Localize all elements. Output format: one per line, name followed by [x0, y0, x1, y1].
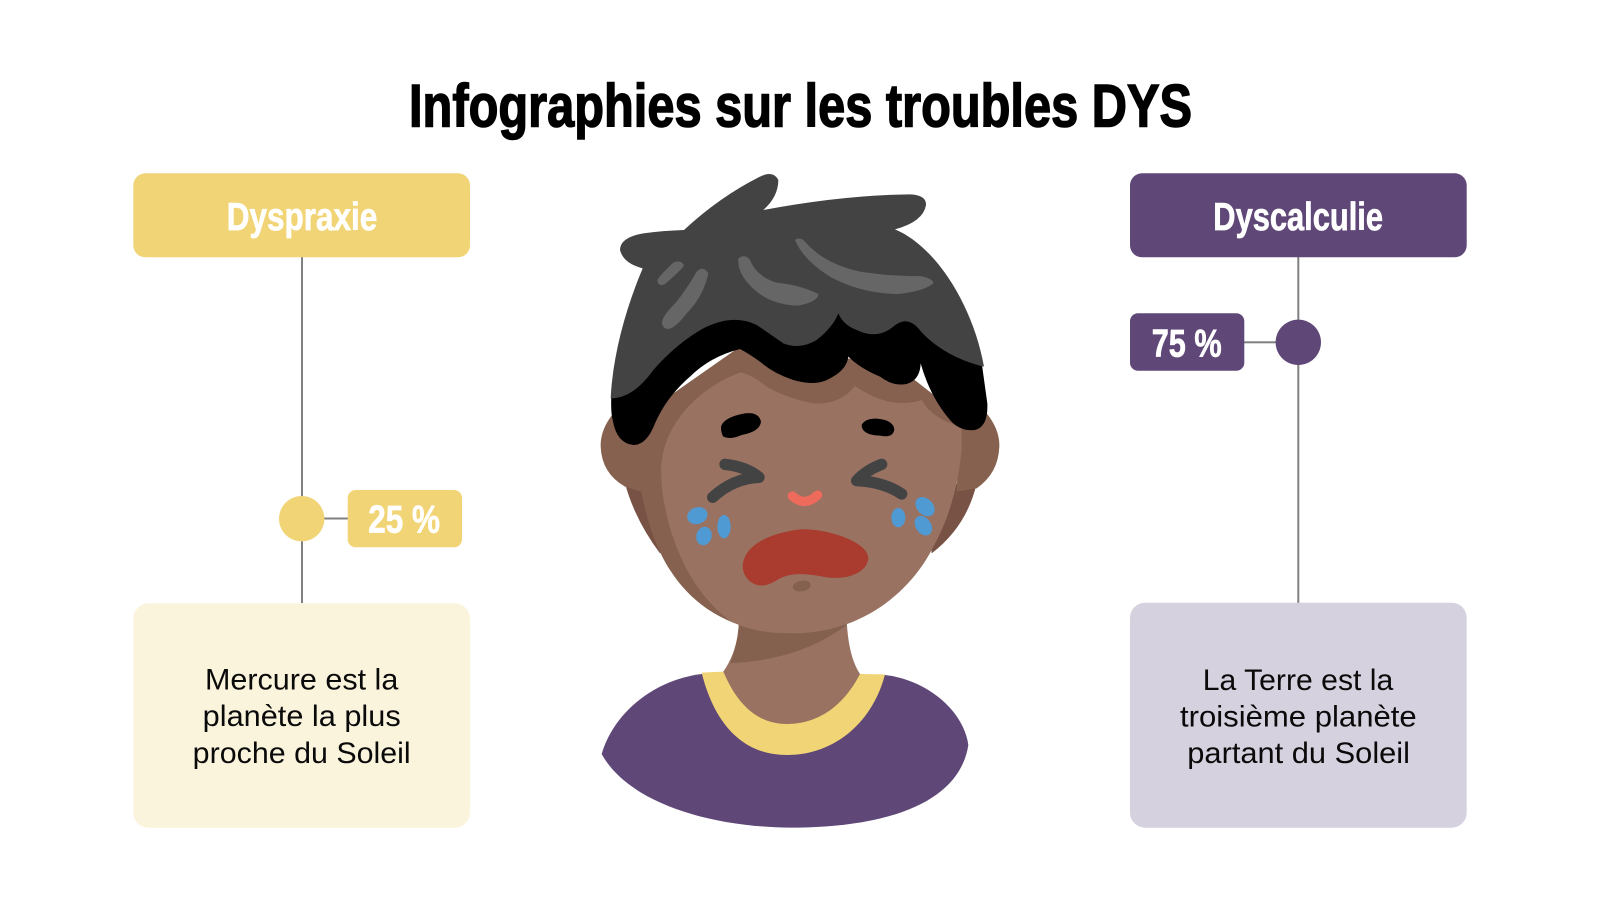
neck: [723, 620, 860, 724]
text block: Mercure: Mercure est la: [205, 663, 399, 696]
text block: Mercure: [133, 603, 470, 828]
hair underside: [611, 257, 987, 445]
percentage badge: 75 %: 75 %: [1152, 323, 1222, 366]
heading: Dyscalculie: [1130, 173, 1467, 257]
hair: [611, 174, 984, 398]
text block: Terre: [1130, 603, 1467, 828]
text block: Terre: La Terre est la: [1203, 664, 1394, 697]
shirt: [602, 674, 968, 828]
text block: Mercure: planète la plus: [203, 700, 401, 733]
panel: Dyspraxie: [133, 173, 470, 828]
title: Infographies sur les troubles DYS: [409, 73, 1192, 140]
panel: Dyscalculie: [1130, 173, 1467, 828]
tears: [685, 493, 938, 547]
ears: [601, 413, 999, 492]
eyebrows: [721, 413, 894, 438]
closed eyes: [713, 464, 902, 497]
heading: Dyspraxie: Dyspraxie: [227, 196, 377, 239]
heading: Dyspraxie: [133, 173, 470, 257]
percentage badge: 75 %: [1130, 313, 1244, 371]
back of head shadow: [625, 483, 977, 553]
chin mark: [792, 579, 811, 593]
hair highlights: [657, 238, 933, 329]
collar: [702, 672, 885, 755]
marker dot: [1276, 320, 1321, 365]
head: [640, 347, 962, 633]
neck shadow: [730, 617, 847, 663]
marker dot: [279, 496, 324, 541]
percentage badge: 25 %: [348, 490, 462, 547]
text block: Terre: troisième planète: [1180, 700, 1417, 734]
nose: [792, 495, 818, 501]
mouth: [743, 529, 868, 586]
heading: Dyscalculie: Dyscalculie: [1213, 196, 1383, 239]
illustration: crying boy: [601, 174, 999, 828]
percentage badge: 25 %: 25 %: [368, 499, 440, 542]
text block: Mercure: proche du Soleil: [193, 737, 411, 770]
text block: Terre: partant du Soleil: [1187, 737, 1410, 770]
face: [661, 373, 962, 633]
